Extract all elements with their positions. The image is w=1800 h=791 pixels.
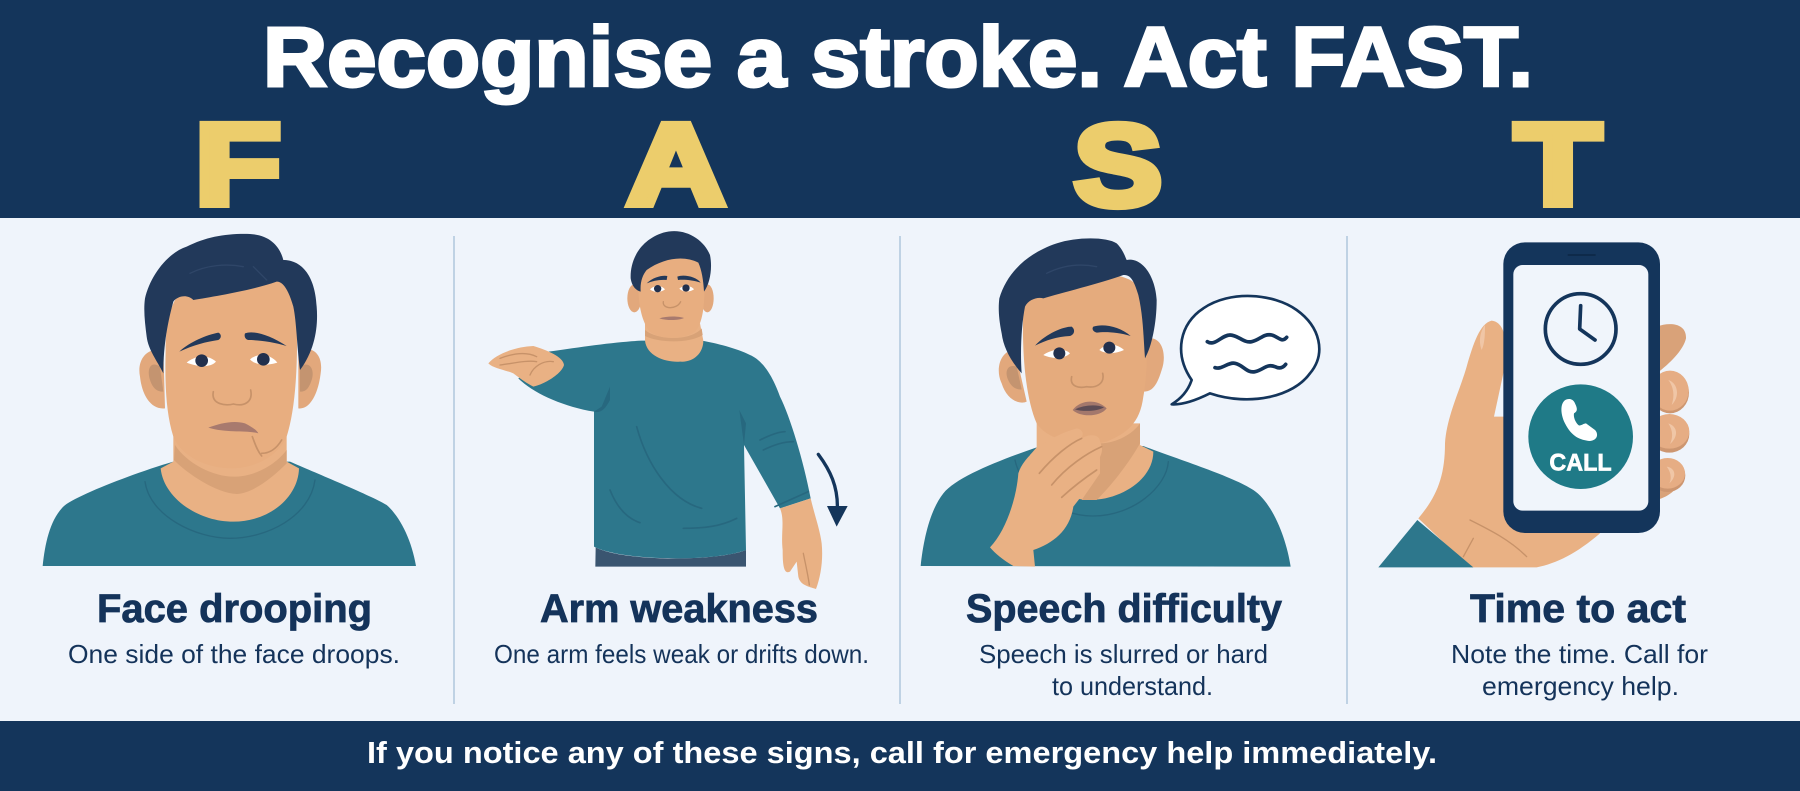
footer band [0,721,1800,791]
title: Recognise a stroke. Act FAST. [263,10,1533,104]
letter T: T [1515,101,1601,229]
call button [1528,384,1633,489]
heading: Face drooping [97,587,372,631]
icon: drift down arrow [818,454,848,527]
call button: CALL [1549,450,1612,477]
description line 2: to understand. [1052,671,1213,701]
icon: clock [1545,294,1616,364]
heading: Speech difficulty [966,587,1283,631]
panel: face drooping [43,234,416,669]
illustration: man with one arm drifting down [488,231,848,589]
heading: Time to act [1470,587,1686,631]
header band [0,0,1800,230]
illustration: man with drooping face [43,234,416,566]
letter S: S [1074,102,1162,230]
heading: Arm weakness [540,587,818,631]
icon: speech bubble with wavy lines [1172,296,1319,404]
description: One arm feels weak or drifts down. [494,639,869,669]
footer message: If you notice any of these signs, call for emergency help immediately. [367,735,1437,770]
panel: time to act [1378,242,1708,701]
letter A: A [627,101,725,229]
illustration: man touching chin with speech bubble [921,238,1319,567]
description line 2: emergency help. [1482,671,1679,701]
letter F: F [195,101,281,229]
description: Note the time. Call for [1451,639,1708,669]
description: Speech is slurred or hard [979,639,1268,669]
panel: arm weakness [488,231,869,669]
description: One side of the face droops. [68,639,400,669]
panel: speech difficulty [921,238,1319,701]
illustration: hand holding phone [1378,242,1689,567]
